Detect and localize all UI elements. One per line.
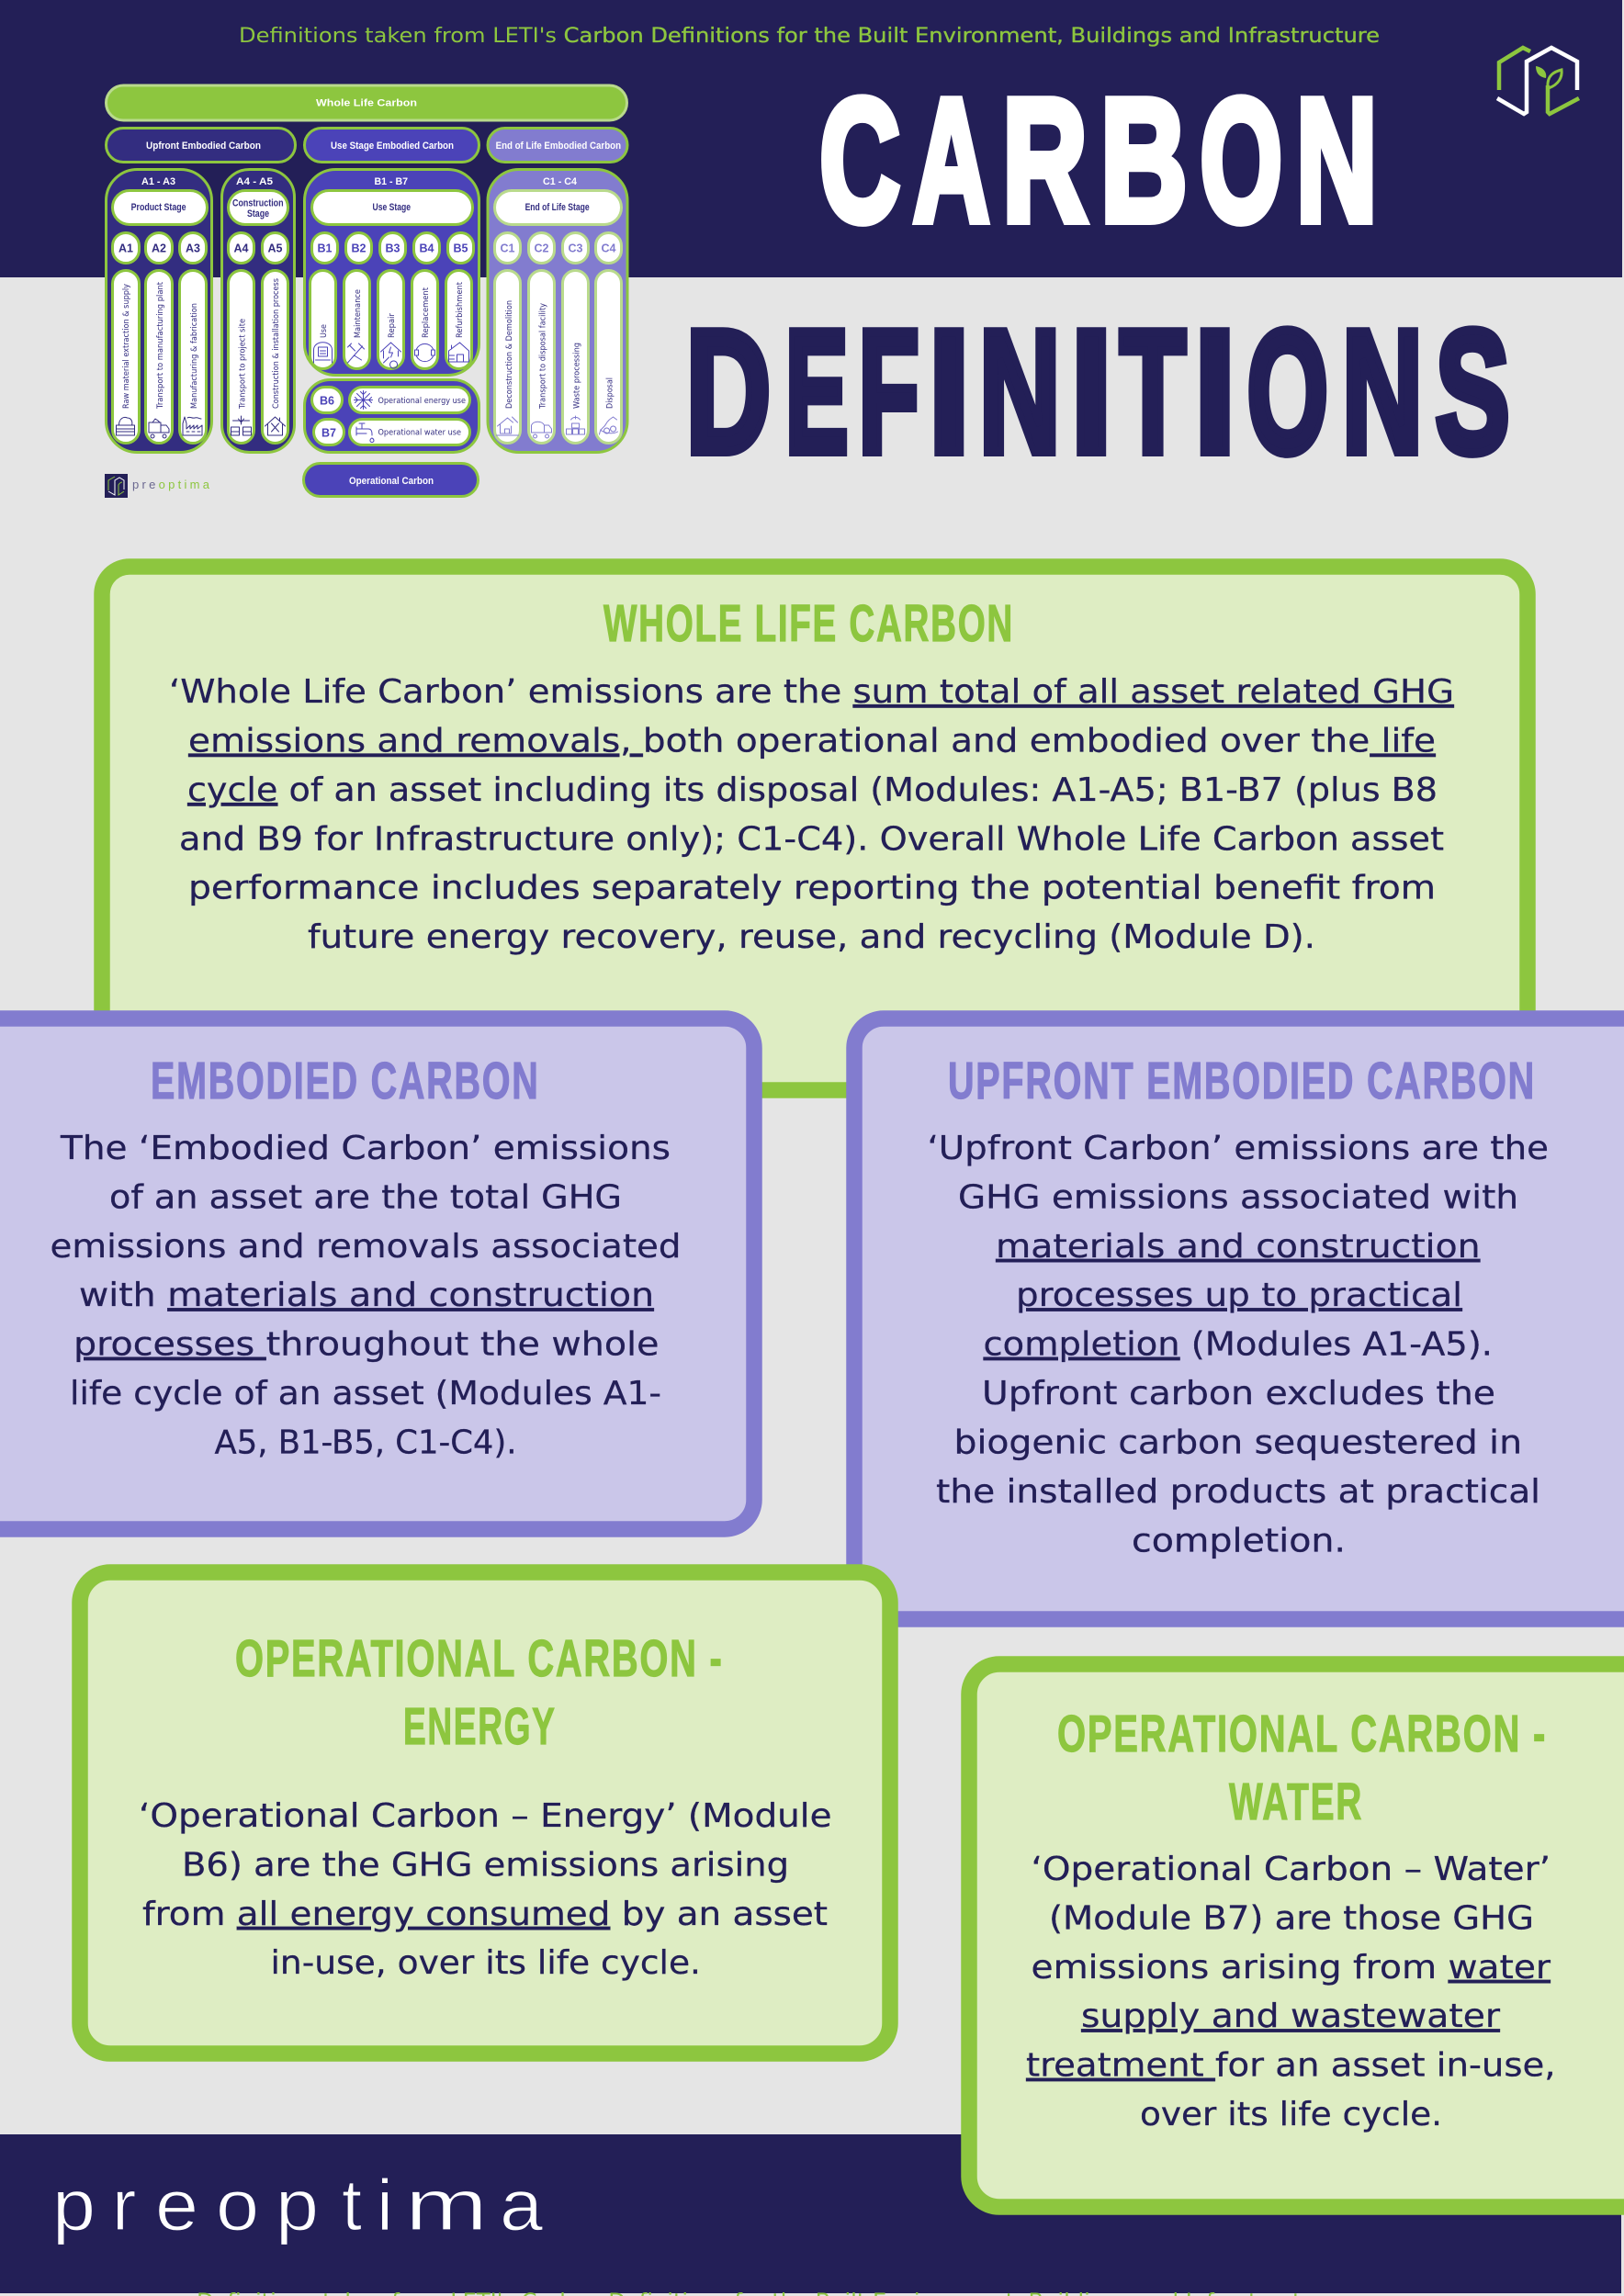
column: C1 - C4: Disposal: [606, 377, 615, 409]
heading: ENERGY: [403, 1697, 557, 1756]
title: definitions: T: [1120, 295, 1186, 490]
whole life carbon bar: [107, 85, 626, 120]
footer logotype: m: [405, 2164, 488, 2245]
footer logotype: r: [112, 2164, 136, 2245]
heading: WHOLE LIFE CARBON: [603, 594, 1014, 653]
icon: waste processing: [566, 416, 584, 434]
column: A4 - A5: A4 - A5: [236, 176, 273, 187]
operational energy use: Operational energy use: [378, 397, 466, 406]
column: C1 - C4: C4: [602, 242, 616, 255]
icon: disposal truck: [531, 422, 551, 438]
operational carbon bar: [303, 463, 478, 496]
body text: [169, 673, 1454, 956]
body text: ‘Operational Carbon – Energy’ (Module: [139, 1797, 832, 1835]
B7 module: B7: [321, 426, 336, 439]
body text: completion.: [1132, 1523, 1346, 1559]
column: C1 - C4: C1 - C4: [543, 176, 578, 187]
use stage pill: [312, 191, 472, 224]
icon: demolition: [496, 417, 518, 435]
body text: the installed products at practical: [936, 1473, 1540, 1511]
icon: maintenance: [347, 343, 364, 363]
column: B1 - B5: B4: [420, 242, 434, 255]
title: carbon: C: [819, 63, 900, 258]
body text: of an asset are the total GHG: [109, 1178, 622, 1216]
body text: materials and construction: [996, 1228, 1481, 1266]
body text: [928, 1130, 1549, 1559]
column: B1 - B5: Use: [320, 324, 329, 338]
body text: [50, 1130, 682, 1461]
body text: [139, 1797, 832, 1982]
body text: performance includes separately reporting the potential benefit from: [188, 870, 1436, 907]
body text: Upfront carbon excludes the: [982, 1375, 1495, 1412]
column: A4 - A5: [222, 169, 294, 452]
body text: The ‘Embodied Carbon’ emissions: [60, 1130, 671, 1167]
panel: upfront embodied carbon: [854, 1019, 1624, 1619]
column: A4 - A5: Construction & installation process: [272, 278, 281, 409]
body text: processes throughout the whole: [73, 1326, 660, 1364]
column: A1 - A3: [107, 169, 211, 452]
heading: WATER: [1229, 1773, 1363, 1831]
title: definitions: E: [785, 295, 849, 490]
B6 module: [312, 388, 342, 413]
icon: preoptima logo: [1497, 48, 1579, 114]
body text: with materials and construction: [79, 1277, 654, 1314]
body text: over its life cycle.: [1140, 2096, 1442, 2133]
body text: GHG emissions associated with: [958, 1178, 1518, 1216]
construction stage pill: Construction: [232, 198, 284, 209]
footer logotype: a: [500, 2164, 543, 2245]
column: A1 - A3: Manufacturing & fabrication: [190, 303, 199, 409]
diagram: carbon life cycle modules: [105, 85, 627, 498]
icon: use: [314, 343, 333, 363]
footer logotype: i: [377, 2164, 393, 2245]
body text: in-use, over its life cycle.: [270, 1944, 701, 1982]
column: C1 - C4: C1: [501, 242, 515, 255]
heading: [1057, 1705, 1547, 1831]
operational energy use: [349, 388, 470, 413]
product stage pill: [112, 191, 208, 224]
body text: B6) are the GHG emissions arising: [182, 1846, 789, 1884]
column: B1 - B5: Refurbishment: [456, 282, 465, 338]
panel: operational carbon water: [969, 1664, 1624, 2207]
icon: repair: [380, 343, 400, 368]
use stage embodied carbon bar: Use Stage Embodied Carbon: [331, 141, 454, 152]
column: A4 - A5: Transport to project site: [238, 319, 247, 410]
small preoptima logo: [105, 474, 210, 498]
body text: cycle of an asset including its disposal (Modules: A1-A5; B1-B7 (plus B8: [187, 771, 1438, 809]
column: A1 - A3: A3: [186, 242, 200, 255]
upfront embodied carbon bar: Upfront Embodied Carbon: [146, 141, 261, 152]
construction stage pill: Stage: [247, 208, 269, 219]
icon: truck: [149, 419, 169, 438]
upfront embodied carbon bar: [107, 129, 296, 162]
column: B1 - B5: Repair: [388, 313, 397, 338]
end of life embodied carbon bar: End of Life Embodied Carbon: [496, 141, 621, 152]
body text: emissions and removals, both operational and embodied over the life: [188, 722, 1436, 760]
title: definitions: I: [1194, 295, 1235, 490]
column: C1 - C4: C3: [569, 242, 583, 255]
body text: ‘Upfront Carbon’ emissions are the: [928, 1130, 1549, 1167]
footer logotype: t: [342, 2164, 362, 2245]
column: C1 - C4: Transport to disposal facility: [539, 302, 548, 410]
column: C1 - C4: Waste processing: [573, 343, 582, 409]
use stage pill: Use Stage: [373, 202, 411, 213]
title: carbon: A: [913, 63, 989, 258]
title: definitions: O: [1247, 295, 1328, 490]
end of life stage pill: End of Life Stage: [525, 202, 590, 213]
column: A1 - A3: Raw material extraction & supply: [122, 283, 131, 409]
product stage pill: Product Stage: [131, 202, 186, 213]
icon: refurbishment: [448, 343, 468, 362]
body text: completion (Modules A1-A5).: [983, 1326, 1493, 1364]
body text: supply and wastewater: [1081, 1998, 1500, 2035]
column: A1 - A3: Transport to manufacturing plant: [156, 282, 165, 410]
heading: [235, 1629, 724, 1756]
column: B1 - B5: Maintenance: [354, 289, 363, 338]
body text: ‘Operational Carbon – Water’: [1031, 1851, 1551, 1888]
body text: treatment for an asset in-use,: [1026, 2047, 1556, 2085]
body text: life cycle of an asset (Modules A1-: [70, 1375, 661, 1412]
icon: replacement: [415, 343, 435, 362]
column: B1 - B5: B5: [454, 242, 468, 255]
footer logotype: p: [276, 2164, 319, 2245]
construction stage pill: [228, 191, 288, 224]
title: carbon: N: [1296, 63, 1377, 258]
body text: emissions arising from water: [1031, 1949, 1551, 1986]
title: carbon: R: [1002, 63, 1088, 258]
body text: [1026, 1851, 1556, 2133]
title: carbon: O: [1200, 63, 1282, 258]
small preoptima logo: pre optima: [132, 478, 210, 491]
column: B1 - B5: B1: [318, 242, 333, 255]
body text: emissions and removals associated: [50, 1228, 682, 1266]
end of life stage pill: [494, 191, 621, 224]
use stage embodied carbon bar: [305, 129, 479, 162]
column: A1 - A3: A1 - A3: [141, 176, 175, 187]
source note: Definitions taken from LETI's Carbon Definitions for the Built Environment, Buildings and Infrastructure: [239, 25, 1380, 48]
column: C1 - C4: C2: [535, 242, 549, 255]
icon: factory: [183, 417, 202, 435]
footer band: [0, 2134, 1621, 2293]
column: A1 - A3: A1: [118, 242, 133, 255]
end of life embodied carbon bar: [488, 129, 627, 162]
column: B1 - B5: Replacement: [422, 287, 431, 338]
panel: operational carbon energy: [80, 1572, 890, 2054]
operational water use: Operational water use: [378, 428, 461, 437]
icon: plane and vehicles: [231, 416, 252, 435]
footer logotype: p: [52, 2164, 96, 2245]
body text: (Module B7) are those GHG: [1049, 1899, 1534, 1937]
body text: future energy recovery, reuse, and recycling (Module D).: [308, 918, 1315, 956]
B6 module: B6: [320, 395, 334, 408]
body text: ‘Whole Life Carbon’ emissions are the sum total of all asset related GHG: [169, 673, 1454, 711]
operational water use: [349, 419, 470, 445]
title: definitions: N: [1342, 295, 1423, 490]
body text: A5, B1-B5, C1-C4).: [215, 1424, 516, 1461]
body text: biogenic carbon sequestered in: [953, 1424, 1522, 1461]
operational carbon bar: Operational Carbon: [349, 476, 434, 487]
title: definitions: N: [979, 295, 1060, 490]
panel: embodied carbon: [0, 1019, 754, 1529]
title: carbon: B: [1100, 63, 1188, 258]
title: definitions: S: [1436, 295, 1510, 490]
column: C1 - C4: Deconstruction & Demolition: [505, 300, 514, 409]
title: definitions: D: [686, 295, 771, 490]
panel: whole life carbon: [102, 567, 1528, 1090]
title: definitions: F: [859, 295, 919, 490]
column: B1 - B5: B3: [386, 242, 400, 255]
B7 module: [314, 419, 344, 445]
title: definitions: I: [929, 295, 970, 490]
column: A4 - A5: A5: [268, 242, 283, 255]
column: B1 - B5: B1 - B7: [375, 176, 408, 187]
heading: OPERATIONAL CARBON -: [235, 1629, 724, 1688]
footer logotype: o: [216, 2164, 259, 2245]
column: C1 - C4: [488, 169, 627, 452]
whole life carbon bar: Whole Life Carbon: [316, 97, 417, 108]
body text: processes up to practical: [1016, 1277, 1462, 1314]
column: A4 - A5: A4: [234, 242, 249, 255]
icon: disposal: [599, 417, 617, 434]
body text: and B9 for Infrastructure only); C1-C4). Overall Whole Life Carbon asset: [179, 820, 1444, 858]
header band: [0, 0, 1622, 277]
panel: B6 and B7 operational use: [305, 380, 479, 452]
column: B1 - B5: [305, 169, 479, 375]
title: definitions: I: [1071, 295, 1112, 490]
icon: raw material: [116, 417, 134, 435]
column: B1 - B5: B2: [352, 242, 367, 255]
body text: from all energy consumed by an asset: [142, 1896, 828, 1933]
column: A1 - A3: A2: [152, 242, 166, 255]
icon: house with tools: [265, 417, 285, 435]
heading: EMBODIED CARBON: [151, 1052, 540, 1110]
footer logotype: e: [155, 2164, 198, 2245]
